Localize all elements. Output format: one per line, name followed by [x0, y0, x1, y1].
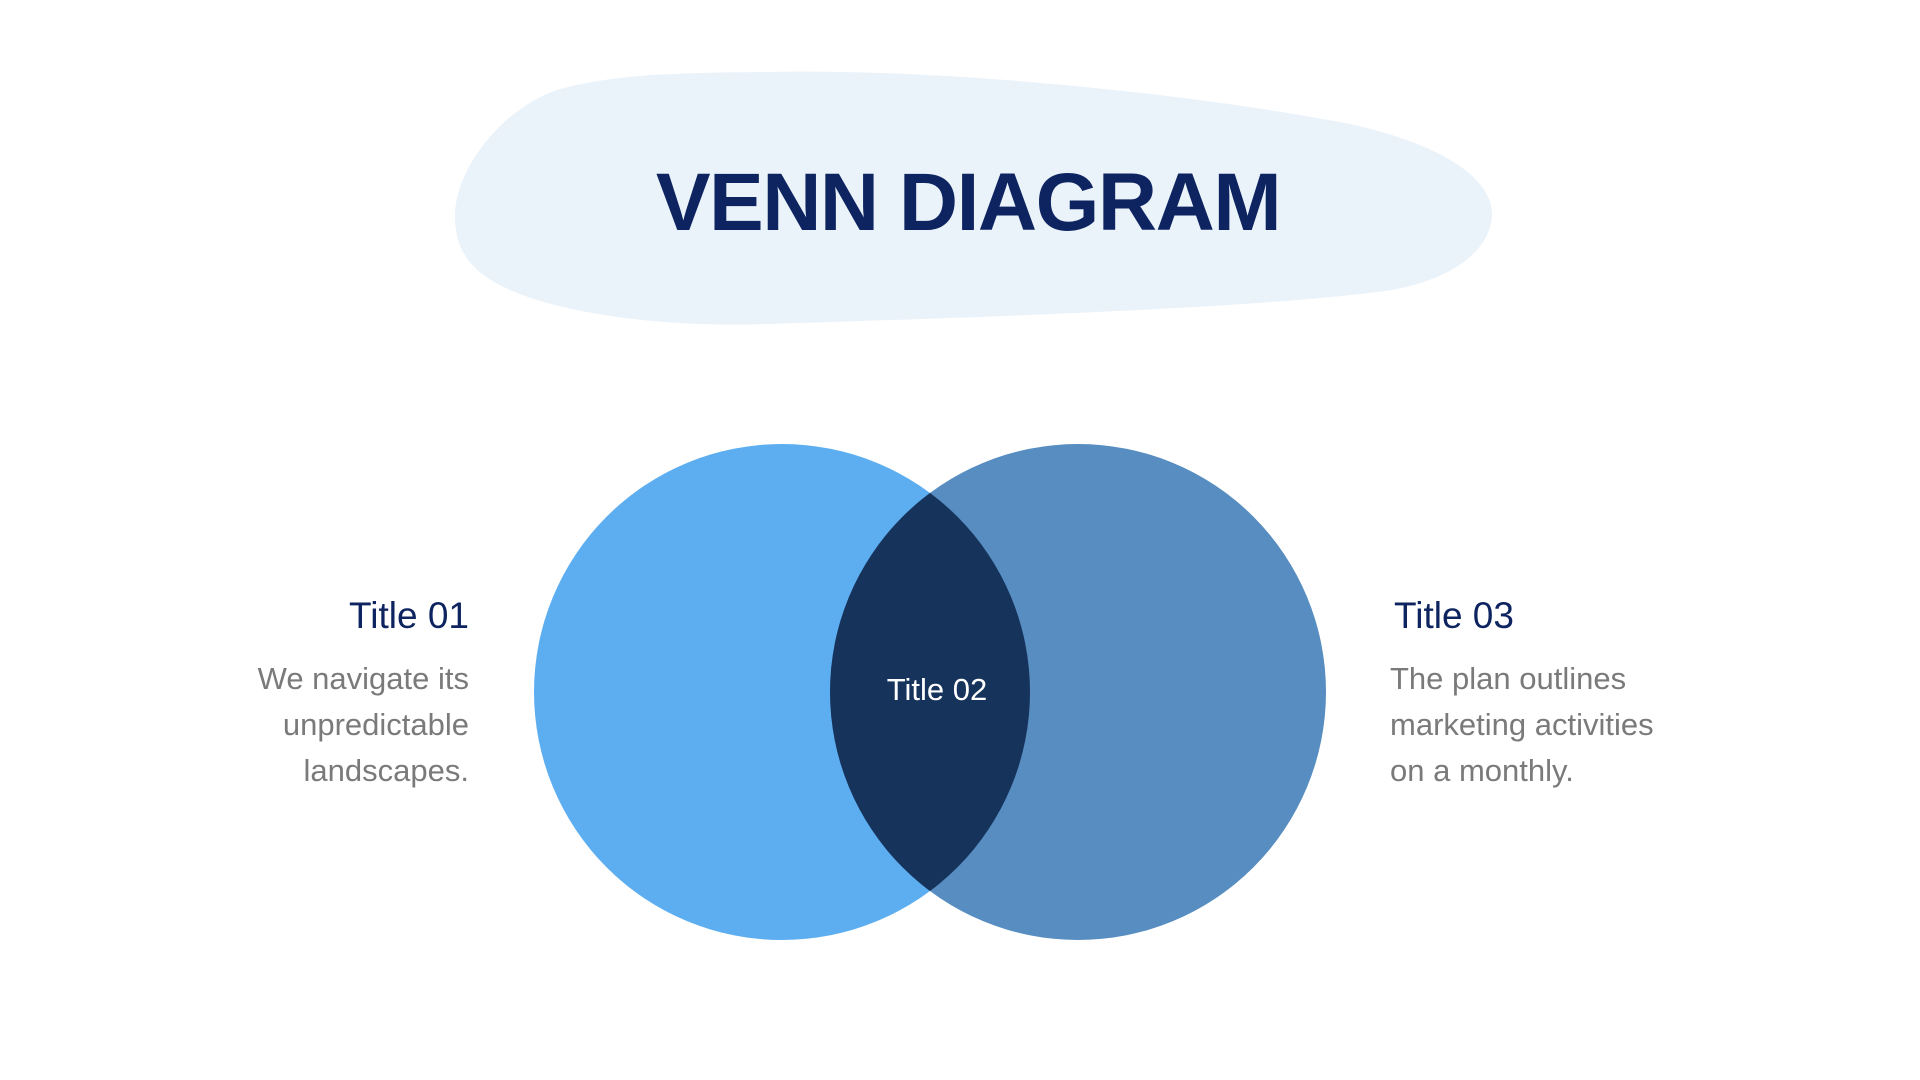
text block: Title 03: The plan outlines	[1390, 661, 1626, 696]
text block: Title 03: on a monthly.	[1390, 753, 1574, 788]
text block: Title 03: Title 03	[1394, 595, 1514, 636]
venn diagram	[534, 444, 1326, 940]
text block: Title 03: marketing activities	[1390, 707, 1654, 742]
text block: Title 01: unpredictable	[283, 707, 469, 742]
text block: Title 01: landscapes.	[304, 753, 469, 788]
circle: left	[534, 444, 1030, 940]
title: VENN DIAGRAM	[656, 157, 1280, 248]
text block: Title 01: We navigate its	[258, 661, 469, 696]
label: Title 02: Title 02	[887, 672, 987, 707]
circle: right	[830, 444, 1326, 940]
intersection	[830, 493, 1030, 891]
text block: Title 03	[1390, 595, 1654, 788]
text block: Title 01: Title 01	[349, 595, 469, 636]
text block: Title 01	[258, 595, 469, 788]
